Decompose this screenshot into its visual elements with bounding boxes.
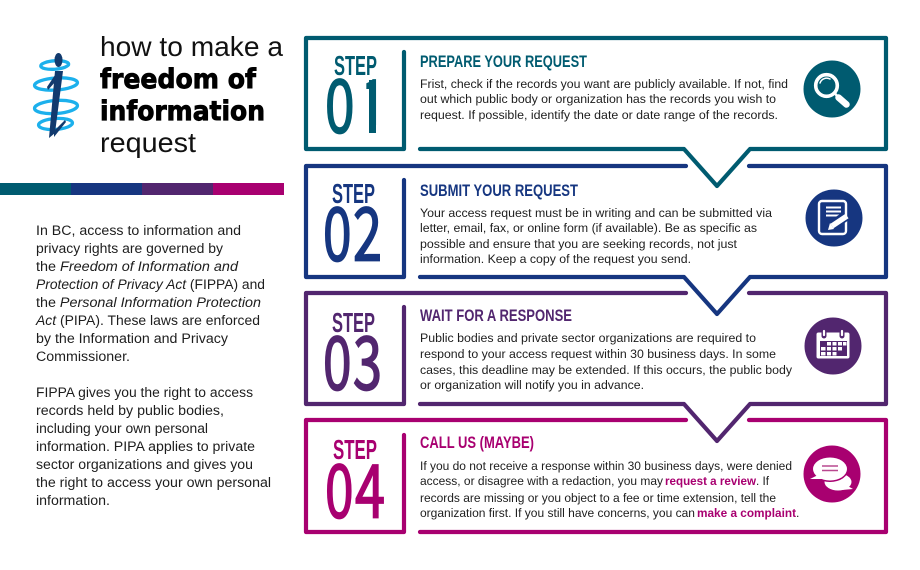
intro text: Protection of Privacy Act (FIPPA) and bbox=[36, 277, 265, 292]
title: request bbox=[100, 127, 196, 158]
step 1 label: 0 bbox=[325, 48, 354, 154]
step 2 text: Your access request must be in writing and can be submitted via bbox=[420, 206, 772, 220]
step 3 text: cases, this deadline may be extended. If this occurs, the public body bbox=[420, 363, 793, 377]
intro text: the right to access your own personal bbox=[36, 475, 271, 490]
step 3 text: respond to your access request within 30 business days. In some bbox=[420, 347, 776, 361]
step 4 label: 0 bbox=[325, 434, 354, 540]
panel: step 1 bbox=[306, 38, 886, 186]
step 4 text: organization first. If you still have concerns, you can bbox=[420, 506, 695, 520]
intro text: records held by public bodies, bbox=[36, 403, 224, 418]
intro text: the Freedom of Information and bbox=[36, 259, 239, 274]
step 4 text: access, or disagree with a redaction, you may bbox=[420, 474, 664, 488]
intro text: sector organizations and gives you bbox=[36, 457, 253, 472]
intro text: information. bbox=[36, 493, 110, 508]
step 2 label: STEP bbox=[332, 178, 375, 209]
step 3 text bbox=[420, 331, 793, 392]
intro text bbox=[35, 223, 271, 508]
step 1 label bbox=[325, 48, 386, 154]
step 2 label bbox=[323, 176, 382, 282]
step 4 text: . bbox=[796, 506, 799, 520]
step 4 label bbox=[325, 434, 385, 540]
step 1 text: Frist, check if the records you want are publicly available. If not, find bbox=[420, 77, 788, 91]
title: information bbox=[100, 96, 265, 127]
step 4 text: request a review bbox=[665, 474, 756, 488]
title bbox=[100, 31, 283, 158]
step 1 text bbox=[420, 77, 788, 122]
step 2 label: 0 bbox=[323, 176, 352, 282]
intro text: including your own personal bbox=[36, 421, 208, 436]
step 4 label: 4 bbox=[355, 434, 385, 540]
step 3 label: 3 bbox=[353, 306, 382, 412]
step 4 text bbox=[420, 459, 799, 520]
step 3 text: or organization will notify you in advance. bbox=[420, 378, 644, 392]
step 2 text: possible and ensure that you are seeking records, not just bbox=[420, 237, 738, 251]
icon: calendar bbox=[804, 318, 862, 374]
step 2 heading: SUBMIT YOUR REQUEST bbox=[420, 182, 578, 200]
step 4 text: . If bbox=[756, 474, 770, 488]
step 1 text: request. If possible, identify the date or date range of the records. bbox=[420, 108, 778, 122]
panel: step 4 bbox=[306, 420, 886, 540]
logo: information i bbox=[34, 53, 78, 138]
panel: step 3 bbox=[306, 293, 886, 441]
intro text: information. PIPA applies to private bbox=[36, 439, 255, 454]
step 3 label: STEP bbox=[332, 307, 375, 338]
step 1 label: STEP bbox=[334, 50, 377, 81]
intro text: by the Information and Privacy bbox=[36, 331, 228, 346]
panel: step 2 bbox=[306, 166, 886, 314]
intro text: privacy rights are governed by bbox=[36, 241, 223, 256]
step 4 text: records are missing or you object to a fee or time extension, tell the bbox=[420, 491, 776, 505]
step 2 text: information. Keep a copy of the request you send. bbox=[420, 252, 691, 266]
step 3 heading: WAIT FOR A RESPONSE bbox=[420, 307, 572, 325]
step 4 label: STEP bbox=[333, 434, 377, 465]
icon: document and pencil bbox=[806, 190, 862, 246]
step 1 label: 1 bbox=[362, 48, 384, 154]
colour strip bbox=[0, 183, 284, 195]
title: freedom of bbox=[100, 64, 256, 95]
step 4 text: make a complaint bbox=[697, 506, 796, 520]
step 3 label: 0 bbox=[323, 306, 352, 412]
step 2 text bbox=[420, 206, 772, 266]
intro text: FIPPA gives you the right to access bbox=[36, 385, 253, 400]
step 1 text: out which public body or organization has the records you wish to bbox=[420, 92, 776, 106]
intro text: the Personal Information Protection bbox=[36, 295, 261, 310]
icon: speech bubbles bbox=[804, 446, 860, 502]
icon: magnifying glass bbox=[804, 60, 860, 118]
intro text: Commissioner. bbox=[36, 349, 130, 364]
step 4 text: If you do not receive a response within 30 business days, were denied bbox=[420, 459, 792, 473]
step 2 label: 2 bbox=[353, 176, 382, 282]
step 3 text: Public bodies and private sector organizations are required to bbox=[420, 331, 756, 345]
step 3 label bbox=[323, 306, 382, 412]
step 2 text: letter, email, fax, or online form (if available). Be as specific as bbox=[420, 221, 757, 235]
intro text: In BC, access to information and bbox=[36, 223, 241, 238]
step 4 heading: CALL US (MAYBE) bbox=[420, 434, 534, 452]
title: how to make a bbox=[100, 31, 283, 62]
step 1 heading: PREPARE YOUR REQUEST bbox=[420, 53, 587, 71]
intro text: Act (PIPA). These laws are enforced bbox=[35, 313, 260, 328]
